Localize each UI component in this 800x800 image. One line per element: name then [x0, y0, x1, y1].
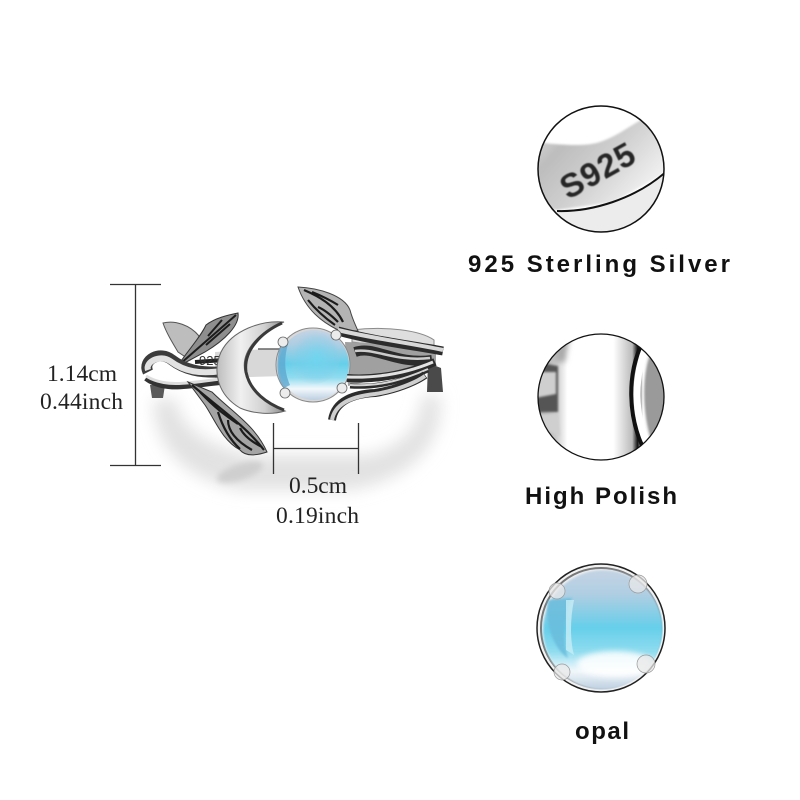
height dimension: [40, 284, 161, 466]
left stem loop: [146, 353, 225, 386]
infographic canvas: [40, 105, 730, 744]
label: High Polish: High Polish: [525, 483, 677, 510]
top left leaf: [177, 313, 238, 367]
right stems and small leaf: [332, 330, 443, 420]
ring illustration: [146, 287, 443, 455]
detail circle: S925 stamp: [537, 105, 665, 233]
ring back band: [150, 328, 443, 398]
engraved text S925: S925: [553, 135, 641, 206]
detail circle: high polish: [537, 333, 665, 461]
right stem backing: [345, 342, 436, 386]
label: opal: opal: [575, 718, 629, 745]
detail circle: opal gem: [537, 564, 665, 692]
left stem loop: 925: [199, 353, 221, 368]
height label: 0.44inch: [40, 389, 123, 415]
gem prongs: [278, 330, 347, 398]
width label: 0.5cm: [289, 473, 347, 499]
label: 925 Sterling Silver: 925 Sterling Silver: [468, 251, 730, 278]
ring shadow and reflection: [153, 395, 440, 490]
prongs: [549, 575, 655, 680]
width dimension: [273, 423, 359, 529]
height label: [40, 361, 123, 415]
width label: 0.19inch: [276, 503, 359, 529]
height label: 1.14cm: [47, 361, 117, 387]
gemstone: [276, 328, 350, 402]
moon inner shadow: [246, 323, 284, 410]
left flared leaf: [163, 322, 199, 360]
width label: [276, 473, 359, 529]
crescent moon: [217, 322, 285, 413]
right top leaf: [298, 287, 358, 331]
bottom left leaf: [188, 382, 267, 455]
